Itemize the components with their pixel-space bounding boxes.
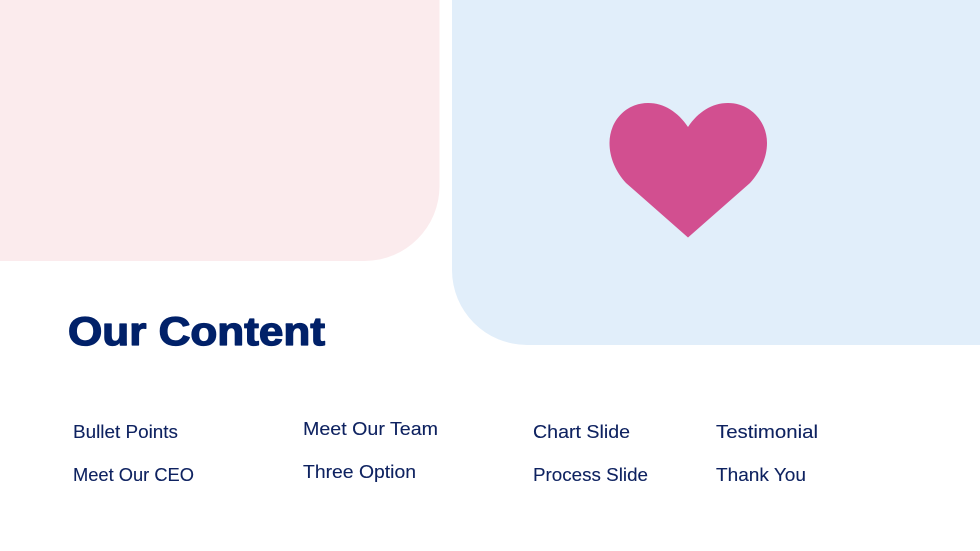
- list item: Process Slide: Process Slide: [533, 464, 648, 485]
- list item: Bullet Points: Bullet Points: [73, 421, 178, 442]
- panel: blue rounded block: [452, 0, 980, 345]
- title: Our Content: [68, 310, 325, 354]
- icon: heart: [610, 103, 767, 238]
- list item: Thank You: Thank You: [716, 464, 806, 485]
- content list: [73, 418, 818, 485]
- panel: pink rounded block: [0, 0, 440, 261]
- list item: Testimonial: Testimonial: [716, 421, 818, 442]
- list item: Three Option: Three Option: [303, 461, 416, 482]
- list item: Meet Our Team: Meet Our Team: [303, 418, 438, 439]
- list item: Meet Our CEO: Meet Our CEO: [73, 464, 194, 485]
- list item: Chart Slide: Chart Slide: [533, 421, 630, 442]
